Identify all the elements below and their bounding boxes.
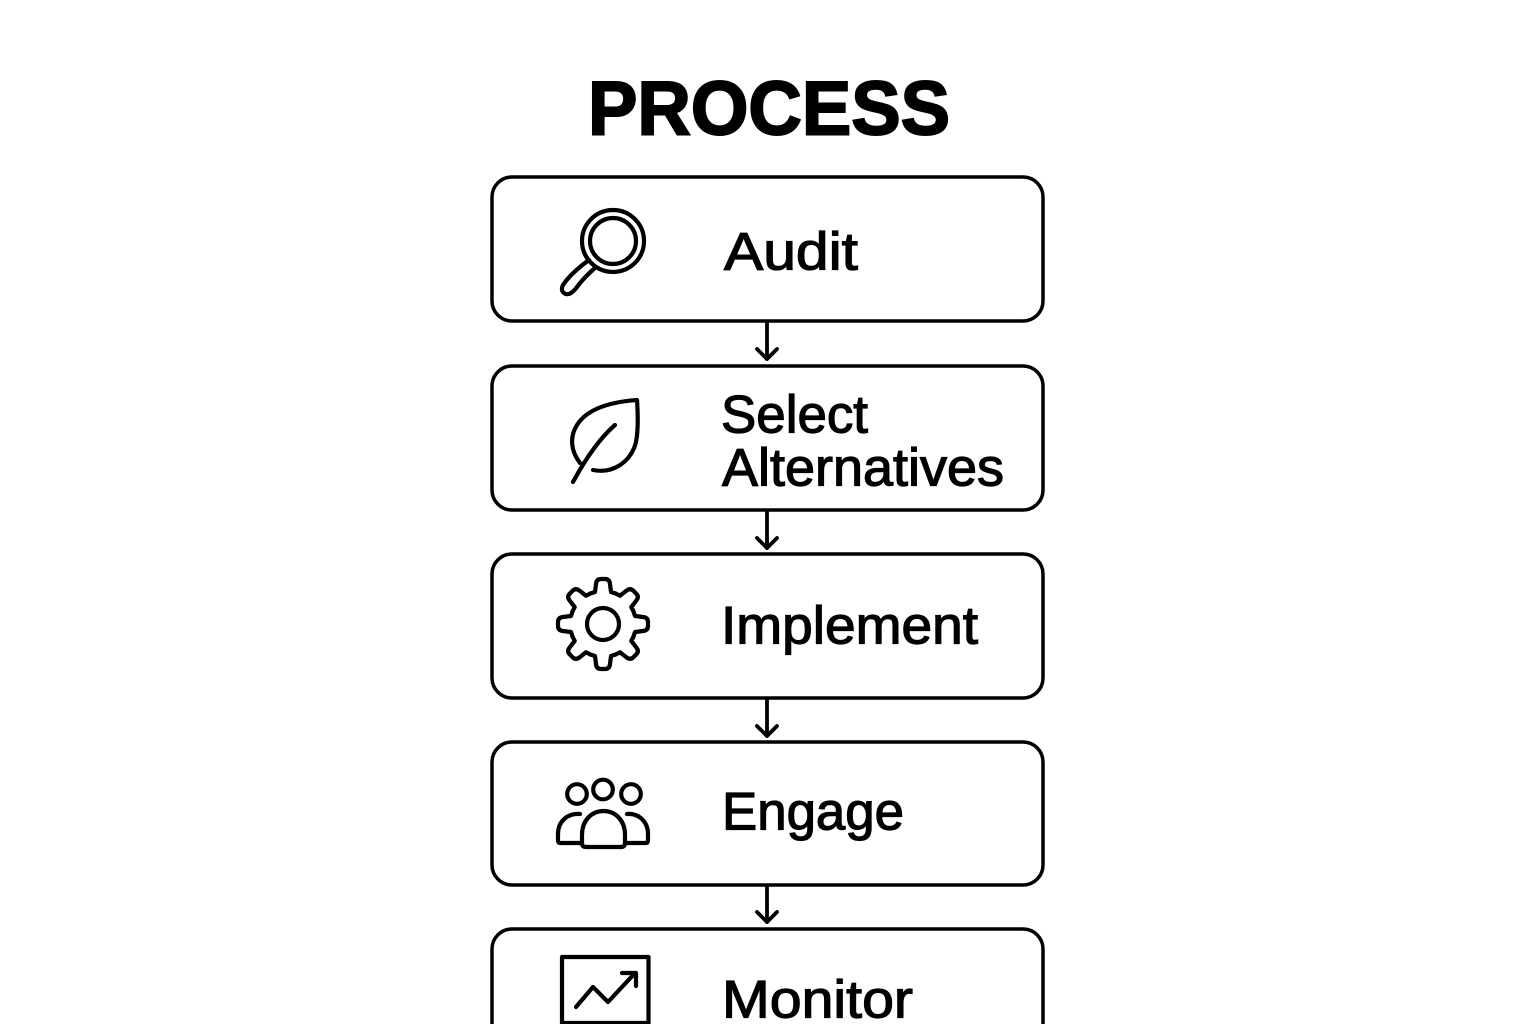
icon: chart [562,957,648,1023]
icon: leaf [572,400,638,482]
title: PROCESS [588,66,950,152]
panel: implement [492,554,1043,698]
arrow: select to implement [757,511,777,548]
panel: select alternatives [492,366,1043,510]
icon: gear [558,579,648,669]
label: audit: Audit [724,222,858,282]
icon: people [558,780,648,847]
arrow: engage to monitor [757,886,777,922]
arrow: audit to select [757,322,777,359]
panel: engage [492,742,1043,885]
label: implement: Implement [721,596,978,656]
icon: magnifying glass [562,210,644,294]
arrow: implement to engage [757,699,777,736]
label: select alternatives [721,386,1004,498]
label: engage: Engage [722,782,904,842]
panel: monitor [492,929,1043,1024]
label: select alternatives: Select [721,386,868,444]
panel: audit [492,177,1043,321]
label: select alternatives: Alternatives [722,438,1004,498]
